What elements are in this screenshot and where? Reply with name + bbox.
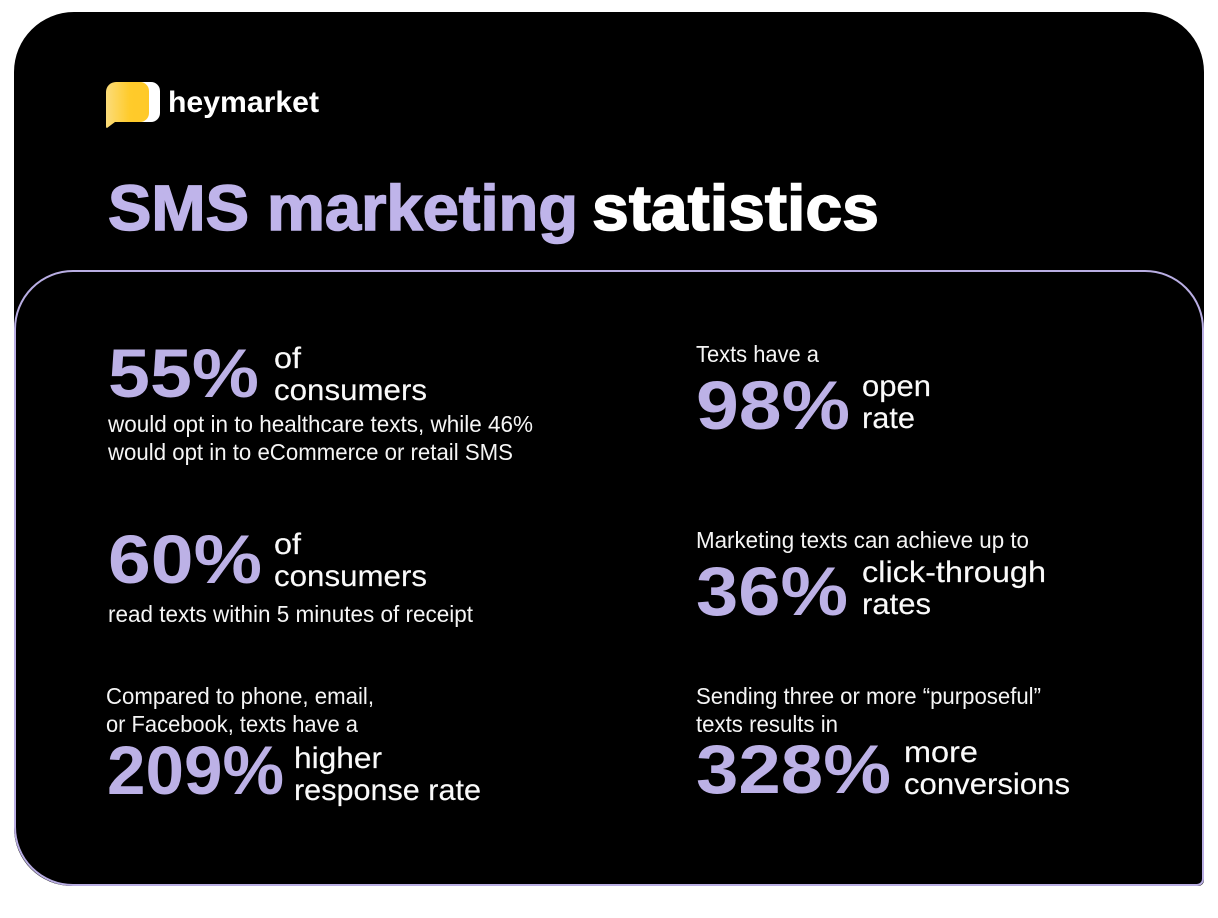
stat: 60% of consumers: of: [274, 528, 302, 561]
stat: 328% more conversions: 328%: [696, 731, 891, 808]
stat: 209% higher response rate: response rate: [294, 774, 481, 807]
stat: 60% of consumers: read texts within 5 minutes of receipt: [108, 601, 474, 627]
stat: 328% more conversions: more: [904, 736, 978, 769]
stat: 209% higher response rate: or Facebook, texts have a: [106, 711, 358, 737]
logo wordmark: heymarket: [168, 86, 319, 119]
title: statistics: [592, 172, 879, 244]
title: SMS marketing: [108, 172, 578, 244]
title: [108, 172, 879, 244]
stat: 209% higher response rate: 209%: [107, 732, 284, 809]
stat: 55% of consumers: consumers: [274, 374, 427, 407]
stat: 98% open rate: open: [862, 370, 931, 403]
stat: 55% of consumers: would opt in to eCommerce or retail SMS: [107, 439, 513, 465]
stat: 36% click-through rates: [696, 527, 1046, 630]
stat: 328% more conversions: Sending three or more “purposeful”: [696, 683, 1041, 709]
stat: 36% click-through rates: Marketing texts can achieve up to: [696, 527, 1029, 553]
icon: chat bubble: [106, 82, 160, 128]
stat: 98% open rate: rate: [862, 402, 915, 435]
panel: statistics outline: [15, 271, 1203, 885]
stat: 36% click-through rates: click-through: [862, 556, 1046, 589]
stat: 209% higher response rate: higher: [294, 742, 382, 775]
stat: 328% more conversions: conversions: [904, 768, 1070, 801]
stat: 209% higher response rate: [106, 683, 481, 809]
stat: 36% click-through rates: 36%: [696, 553, 848, 630]
stat: 55% of consumers: [107, 335, 533, 465]
stat: 55% of consumers: 55%: [108, 335, 259, 412]
stat: 60% of consumers: 60%: [108, 521, 262, 598]
stat: 55% of consumers: would opt in to healthcare texts, while 46%: [107, 411, 533, 437]
stat: 60% of consumers: consumers: [274, 560, 427, 593]
logo: heymarket: [106, 82, 319, 128]
stat: 328% more conversions: texts results in: [696, 711, 838, 737]
stat: 60% of consumers: [108, 521, 474, 627]
stat: 98% open rate: 98%: [696, 367, 850, 444]
stat: 36% click-through rates: rates: [862, 588, 931, 621]
stat: 98% open rate: [696, 341, 931, 444]
stat: 209% higher response rate: Compared to phone, email,: [106, 683, 374, 709]
stat: 328% more conversions: [696, 683, 1070, 808]
stat: 55% of consumers: of: [274, 342, 302, 375]
stat: 98% open rate: Texts have a: [696, 341, 819, 367]
